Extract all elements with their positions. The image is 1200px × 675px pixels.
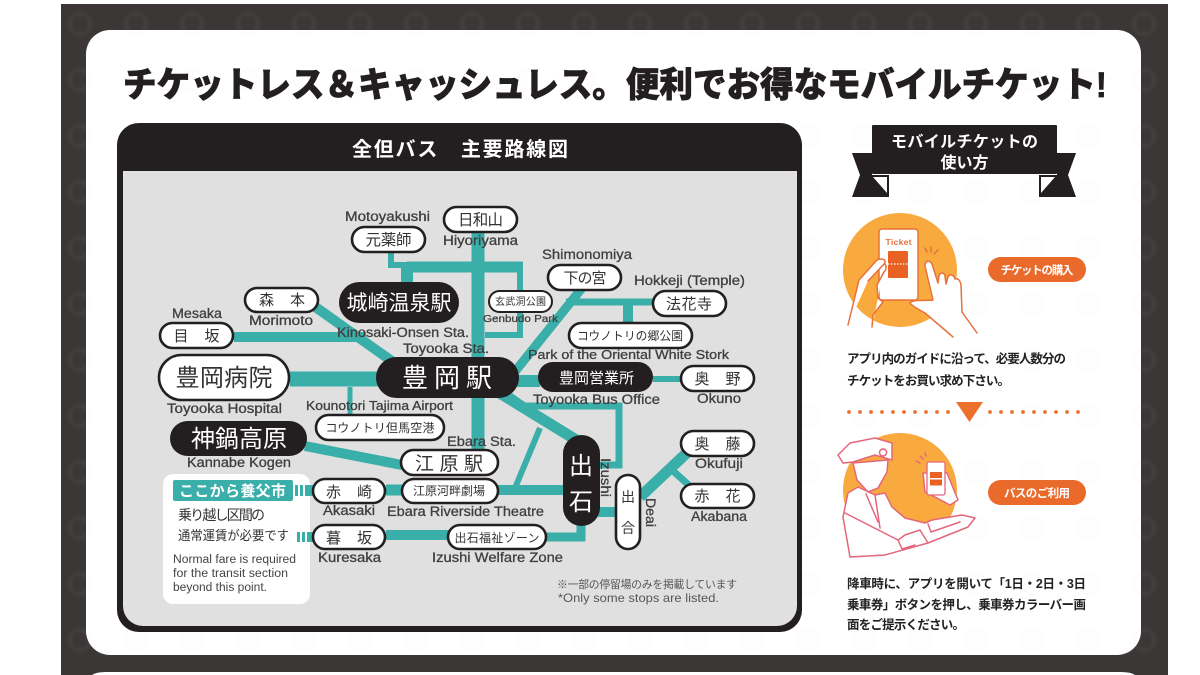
station: Okuno (681, 366, 754, 391)
text: purchase instructions (847, 351, 1066, 388)
label: Toyooka Sta.: Toyooka Sta. (403, 341, 489, 356)
label: Toyooka Bus Office: Toyooka Bus Office (533, 392, 660, 407)
station: Shimonomiya: 下の宮 (564, 270, 606, 287)
station: Akasaki (313, 479, 385, 503)
station: Shimonomiya (548, 265, 621, 290)
route lines (234, 230, 692, 537)
label: Izushi: Izushi (598, 458, 613, 497)
label: Kinosaki-Onsen: Kinosaki-Onsen Sta. (337, 325, 469, 340)
map frame (117, 123, 802, 632)
text: purchase instructions: アプリ内のガイドに沿って、必要人数分の (847, 351, 1066, 366)
station: Kannabe Kogen: 神鍋高原 (191, 426, 287, 453)
station: Akabana (681, 484, 754, 508)
title: チケットレス＆キャッシュレス。便利でお得なモバイルチケット! (123, 66, 1107, 105)
label: Shimonomiya: Shimonomiya (542, 247, 633, 262)
station: Mesaka: 目 坂 (174, 328, 220, 345)
station: Motoyakushi (352, 227, 425, 252)
station: Hokkeji: 法花寺 (666, 296, 712, 313)
phone (879, 229, 918, 300)
note Japanese text: 乗り越し区間の (178, 507, 265, 523)
map area (123, 171, 797, 626)
text: boarding instructions: 乗車券」ボタンを押し、乗車券カラーバー画 (847, 597, 1086, 612)
station: Park of the Oriental White Stork (569, 323, 692, 348)
ticket word: Ticket (886, 237, 912, 247)
station: Kuresaka: 暮 坂 (326, 530, 372, 547)
station: Okufuji (681, 431, 754, 456)
station: Toyooka Station (376, 357, 519, 398)
station: Deai (616, 475, 640, 549)
arrow: dotted divider (847, 402, 1080, 422)
label: Okufuji: Okufuji (695, 456, 743, 471)
station: Morimoto (245, 288, 318, 312)
station: Okuno: 奥 野 (694, 371, 740, 388)
station: Kounotori Tajima Airport (316, 415, 444, 440)
note Japanese text line 2: 通常運賃が必要です (178, 528, 289, 543)
right hand (910, 261, 977, 337)
station: Izushi: 出 (569, 453, 593, 480)
left hand (848, 259, 886, 327)
ticket perforation (888, 263, 908, 265)
station: Genbudo Park: 玄武洞公園 (495, 295, 546, 308)
button: purchase (988, 257, 1086, 282)
driver hat (838, 438, 892, 463)
label: Kannabe Kogen: Kannabe Kogen (187, 455, 291, 470)
label: Deai: Deai (643, 498, 658, 527)
icon: phone purchase (843, 213, 977, 337)
station: Toyooka Bus Office (538, 362, 653, 392)
label: Hiyoriyama: Hiyoriyama (443, 233, 519, 248)
note box (163, 474, 310, 604)
button: bus use: バスのご利用 (1004, 486, 1070, 500)
label: Hokkeji: Hokkeji (Temple) (634, 273, 745, 288)
station: Kounotori Tajima Airport: コウノトリ但馬空港 (326, 421, 434, 435)
label: Genbudo Park: Genbudo Park (483, 313, 559, 325)
station: Deai: 合 (621, 520, 635, 536)
station: Okufuji: 奥 藤 (694, 436, 740, 453)
station: Toyooka Hospital: 豊岡病院 (176, 365, 272, 392)
label: Ebara Sta.: Ebara Sta. (447, 434, 516, 449)
fare boundary dashes (295, 485, 313, 542)
station: Motoyakushi: 元薬師 (366, 231, 412, 249)
station: Mesaka (160, 323, 233, 348)
station: Toyooka Bus Office: 豊岡営業所 (559, 370, 634, 387)
station: Ebara Station (401, 450, 498, 475)
button: bus use (988, 480, 1086, 505)
label: Toyooka Hospital: Toyooka Hospital (167, 401, 282, 416)
station: Ebara Riverside Theatre (402, 479, 498, 503)
label: Kuresaka: Kuresaka (318, 550, 382, 565)
text: boarding instructions (847, 576, 1086, 632)
station: Akasaki: 赤 崎 (326, 484, 372, 501)
station: Kuresaka (313, 525, 385, 549)
station: Deai: 出 (621, 489, 635, 505)
station: Ebara Riverside Theatre: 江原河畔劇場 (413, 484, 485, 498)
heading ribbon: how to use: モバイルチケットの (891, 133, 1038, 151)
note label (173, 480, 293, 501)
tap marks (925, 247, 938, 254)
note label text: ここから養父市 (179, 482, 286, 500)
footnote Japanese: ※一部の停留場のみを掲載しています (557, 578, 737, 591)
icon: showing phone to driver (838, 433, 975, 557)
station: Izushi Welfare Zone: 出石福祉ゾーン (454, 530, 540, 545)
footnote English: *Only some stops are listed. (558, 591, 719, 605)
label: Okuno: Okuno (697, 391, 741, 406)
driver body (843, 487, 975, 557)
note English text line 2: for the transit section (173, 568, 288, 580)
station: Izushi Welfare Zone (448, 525, 546, 549)
passenger hand with phone (923, 473, 958, 505)
map heading: 全但バス 主要路線図 (352, 138, 568, 161)
phone ticket (930, 472, 942, 486)
label: Akabana: Akabana (691, 509, 748, 524)
next card edge at bottom (92, 672, 1135, 675)
heading ribbon: how to use: 使い方 (940, 153, 988, 172)
label: Morimoto: Morimoto (249, 313, 313, 328)
label: Ebara Riverside Theatre: Ebara Riverside Theatre (387, 504, 544, 519)
station: Ebara Station: 江原駅 (415, 453, 483, 475)
label: Akasaki: Akasaki (323, 503, 375, 518)
station: Izushi (563, 435, 600, 526)
small phone (927, 462, 945, 495)
station: Kannabe Kogen (170, 421, 307, 456)
driver face (853, 460, 888, 492)
text: boarding instructions: 降車時に、アプリを開いて「1日・2日・3日 (847, 576, 1086, 591)
station: Hokkeji (653, 291, 726, 316)
label: Mesaka: Mesaka (172, 306, 223, 321)
label: Izushi Welfare Zone: Izushi Welfare Zone (432, 550, 563, 565)
tap marks (916, 453, 926, 463)
button: purchase: チケットの購入 (1000, 263, 1074, 277)
text: boarding instructions: 面をご提示ください。 (847, 617, 965, 632)
panel: route map (117, 123, 802, 632)
note English text: Normal fare is required (173, 554, 296, 566)
station: Morimoto: 森 本 (259, 292, 305, 309)
label: Park of the Oriental White Stork: Park of the Oriental White Stork (528, 347, 730, 362)
station: Akabana: 赤 花 (694, 488, 740, 505)
station: Park of the Oriental White Stork: コウノトリの郷公園 (577, 329, 683, 343)
ticket (888, 251, 908, 278)
label: Kounotori Tajima Airport: Kounotori Tajima Airport (306, 399, 454, 413)
station: Hiyoriyama (444, 207, 517, 232)
station: Hiyoriyama: 日和山 (458, 211, 503, 229)
label: Motoyakushi: Motoyakushi (345, 209, 430, 224)
station: Izushi: 石 (569, 489, 593, 516)
station: Genbudo Park (489, 291, 552, 312)
station: Toyooka Station: 豊岡駅 (402, 363, 492, 393)
station: Kinosaki Onsen (339, 282, 459, 323)
driver details (845, 449, 960, 549)
text: purchase instructions: チケットをお買い求め下さい。 (847, 373, 1010, 388)
heading ribbon: how to use (852, 125, 1076, 197)
note English text line 3: beyond this point. (173, 582, 267, 594)
station: Toyooka Hospital (159, 355, 289, 400)
station: Kinosaki Onsen: 城崎温泉駅 (346, 292, 452, 315)
